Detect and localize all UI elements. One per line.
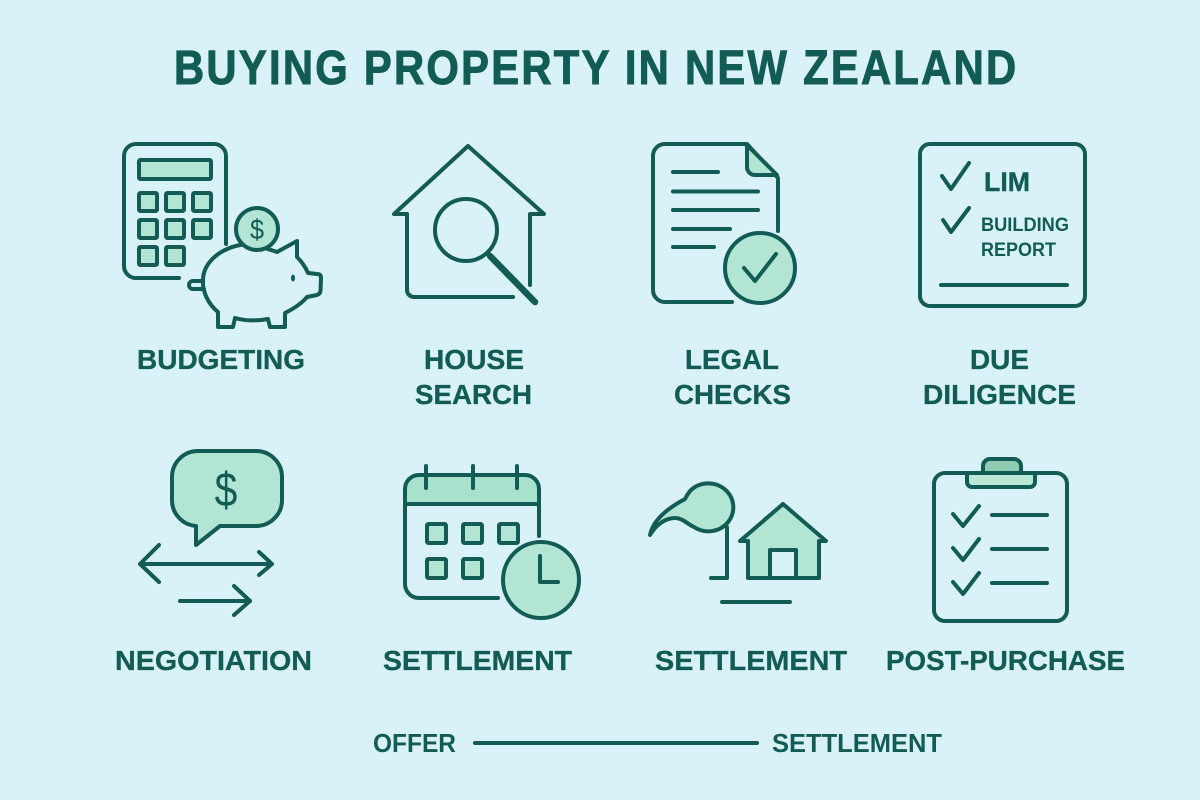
icon: calculator and piggy bank: $ [250, 214, 264, 245]
icon: clipboard checklist [934, 459, 1067, 621]
panel: settlement calendar [383, 466, 579, 676]
icon: speech bubble and arrows: $ [215, 464, 238, 517]
panel: budgeting [124, 144, 321, 375]
icon: calendar with clock [405, 466, 579, 618]
timeline line [475, 741, 757, 745]
icon: LIM and building report checklist: LIM [984, 167, 1030, 197]
label: house search [415, 344, 532, 410]
label: legal checks: CHECKS [674, 379, 791, 410]
label: settlement: SETTLEMENT [772, 728, 942, 758]
icon: document with check badge [653, 144, 795, 303]
panel: legal checks [653, 144, 795, 410]
label: legal checks [674, 344, 791, 410]
label: due diligence: DILIGENCE [923, 379, 1076, 410]
icon: LIM and building report checklist: REPORT [981, 240, 1056, 261]
label: post-purchase: POST-PURCHASE [886, 645, 1125, 676]
panel: house search [394, 146, 544, 410]
title: BUYING PROPERTY IN NEW ZEALAND [174, 40, 1016, 95]
label: offer: OFFER [373, 728, 456, 758]
label: settlement: SETTLEMENT [383, 645, 572, 676]
label: house search: SEARCH [415, 379, 532, 410]
label: house search: HOUSE [424, 344, 524, 375]
label: negotiation: NEGOTIATION [115, 645, 312, 676]
icon: calculator and piggy bank [124, 144, 321, 327]
icon: house with magnifying glass [394, 146, 544, 302]
panel: settlement kiwi [650, 483, 847, 676]
panel: negotiation [115, 451, 312, 676]
icon: speech bubble and arrows [140, 451, 282, 615]
icon: LIM and building report checklist [920, 144, 1085, 306]
label: due diligence [923, 344, 1076, 410]
label: settlement: SETTLEMENT [655, 645, 847, 676]
timeline: offer to settlement [373, 728, 942, 758]
label: budgeting: BUDGETING [137, 344, 305, 375]
panel: post-purchase [886, 459, 1125, 676]
icon: LIM and building report checklist: BUILDING [981, 215, 1069, 236]
label: due diligence: DUE [970, 344, 1029, 375]
icon: kiwi bird and house [650, 483, 826, 602]
panel: due diligence [920, 144, 1085, 410]
label: legal checks: LEGAL [685, 344, 779, 375]
